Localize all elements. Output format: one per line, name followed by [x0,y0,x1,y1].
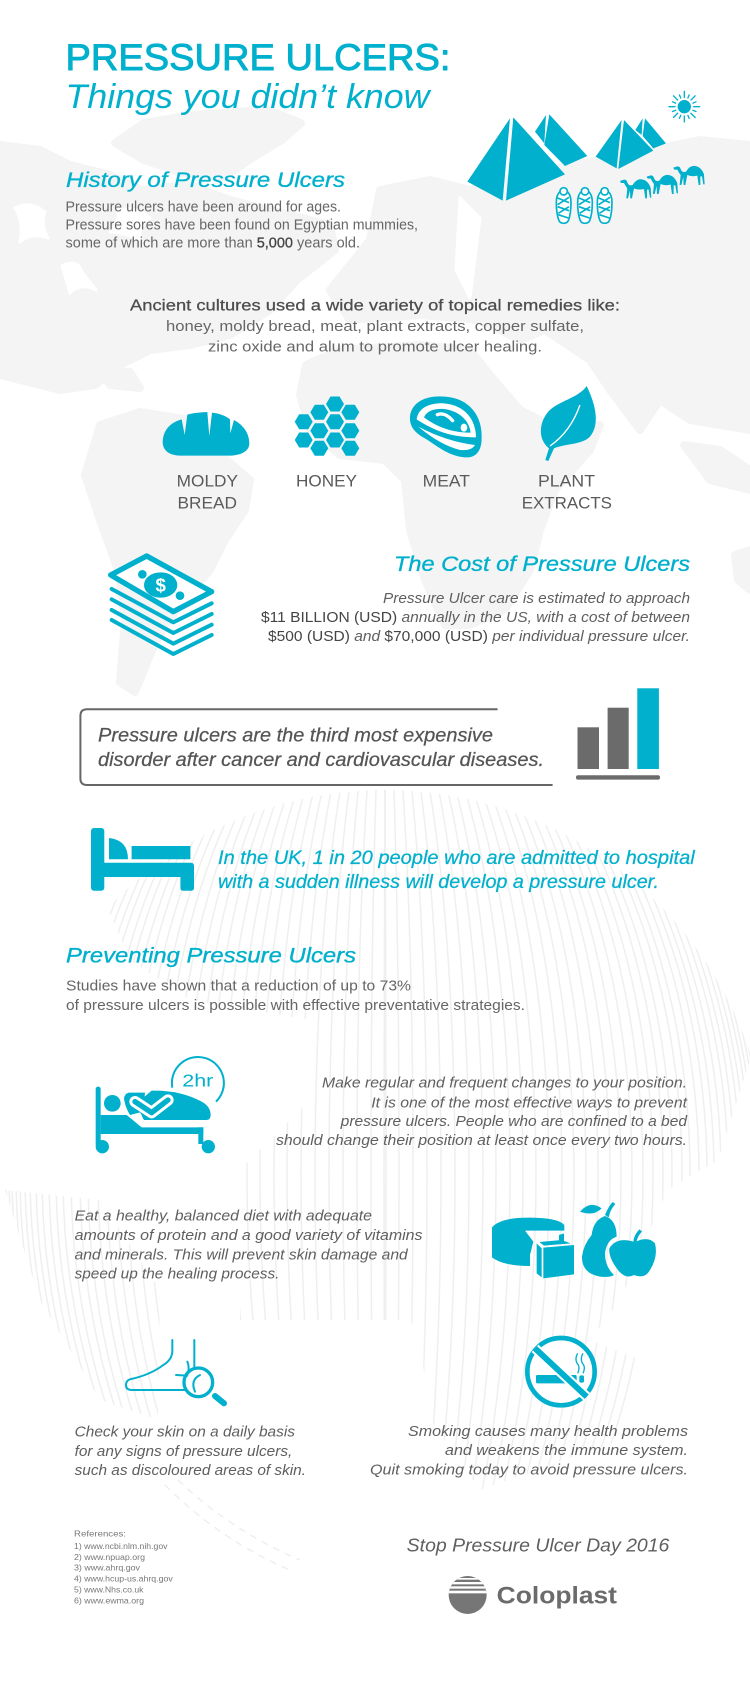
title: Things you didn’t know [66,78,432,116]
remedies intro text: Ancient cultures used a wide variety of topical remedies like: [130,298,620,315]
smoking text: Quit smoking today to avoid pressure ulcers. [370,1462,688,1478]
callout: third most expensive: Pressure ulcers are the third most expensive [98,726,493,747]
icon: sun [669,91,700,122]
references [74,1529,173,1605]
icon: pyramids, sun, camels and mummies [467,91,705,223]
skin check text: Check your skin on a daily basis [75,1425,295,1441]
label: plant extracts: EXTRACTS [522,494,612,513]
skin check text: for any signs of pressure ulcers, [75,1444,292,1460]
callout: third most expensive [80,709,553,785]
remedies intro text: honey, moldy bread, meat, plant extracts, copper sulfate, [166,319,584,335]
diet text: amounts of protein and a good variety of vitamins [75,1228,422,1244]
smoking text: and weakens the immune system. [445,1443,688,1459]
cost body text: $500 (USD) and $70,000 (USD) per individual pressure ulcer. [268,629,690,645]
references: 1) www.ncbi.nlm.nih.gov [74,1541,168,1551]
icon: leaf [541,386,596,461]
preventing body text [66,979,525,1014]
background: world map [0,110,750,692]
history body text: Pressure ulcers have been around for ages. [66,200,341,216]
diet text [75,1209,422,1282]
label: plant extracts [522,472,612,513]
background: dotted line globe [6,790,750,1490]
references: 6) www.ewma.org [74,1595,144,1605]
label: meat: MEAT [423,472,470,491]
remedies intro text [130,298,620,356]
diet text: speed up the healing process. [75,1266,279,1282]
history body text [66,200,418,252]
cost body text: Pressure Ulcer care is estimated to approach [383,591,690,607]
icon: stack of money: $ [155,575,166,596]
preventing body text: Studies have shown that a reduction of up to 73% [66,979,411,995]
diet text: Eat a healthy, balanced diet with adequate [75,1209,372,1225]
UK statistic text: In the UK, 1 in 20 people who are admitted to hospital [218,848,696,869]
icon: camels [620,166,705,198]
icon: pyramids [467,114,666,201]
skin check text [75,1425,306,1479]
icon: stack of money [111,556,212,654]
cost body text [261,591,690,645]
label: honey: HONEY [296,472,357,491]
icon: cheese, pear and apple [492,1202,656,1278]
history body text: some of which are more than 5,000 years old. [66,236,360,252]
title [66,36,450,116]
references: 3) www.ahrq.gov [74,1563,141,1573]
footer tagline: Stop Pressure Ulcer Day 2016 [407,1536,670,1556]
icon: mummies [556,188,612,223]
icon: patient in bed with 2hr timer [96,1057,224,1153]
UK statistic text: with a sudden illness will develop a pressure ulcer. [218,872,659,893]
label: moldy bread: MOLDY [177,472,238,491]
icon: bar chart [576,688,660,780]
position change text [276,1076,688,1149]
smoking text [370,1424,688,1478]
icon: patient in bed with 2hr timer: 2hr [182,1070,213,1090]
logo: Coloplast [447,1575,617,1615]
position change text: pressure ulcers. People who are confined to a bed [340,1114,688,1130]
icon: foot with magnifying glass [126,1340,224,1403]
section: history heading: History of Pressure Ulcers [66,168,345,192]
icon: hospital bed [91,828,194,891]
references: 4) www.hcup-us.ahrq.gov [74,1573,173,1583]
diet text: and minerals. This will prevent skin damage and [75,1247,409,1263]
title: PRESSURE ULCERS: [66,36,450,78]
section: preventing heading: Preventing Pressure Ulcers [66,944,356,968]
position change text: Make regular and frequent changes to your position. [322,1076,687,1092]
references: 5) www.Nhs.co.uk [74,1584,144,1594]
section: cost heading: The Cost of Pressure Ulcers [394,552,690,576]
references: 2) www.npuap.org [74,1552,145,1562]
skin check text: such as discoloured areas of skin. [75,1463,306,1479]
callout: third most expensive: disorder after cancer and cardiovascular diseases. [98,750,544,771]
label: plant extracts: PLANT [538,472,595,491]
remedies intro text: zinc oxide and alum to promote ulcer healing. [208,340,542,356]
position change text: should change their position at least once every two hours. [276,1133,687,1149]
UK statistic text [218,848,696,893]
history body text: Pressure sores have been found on Egyptian mummies, [66,218,418,234]
icon: honeycomb [295,396,359,456]
preventing body text: of pressure ulcers is possible with effective preventative strategies. [66,998,525,1014]
label: moldy bread: BREAD [178,494,237,513]
smoking text: Smoking causes many health problems [408,1424,688,1440]
icon: bread [163,412,249,456]
icon: no smoking [527,1338,595,1405]
icon: meat [410,396,482,457]
position change text: It is one of the most effective ways to prevent [371,1095,688,1111]
label: moldy bread [177,472,238,513]
references: References: [74,1529,126,1539]
cost body text: $11 BILLION (USD) annually in the US, with a cost of between [261,610,690,626]
logo: Coloplast: Coloplast [497,1582,617,1609]
